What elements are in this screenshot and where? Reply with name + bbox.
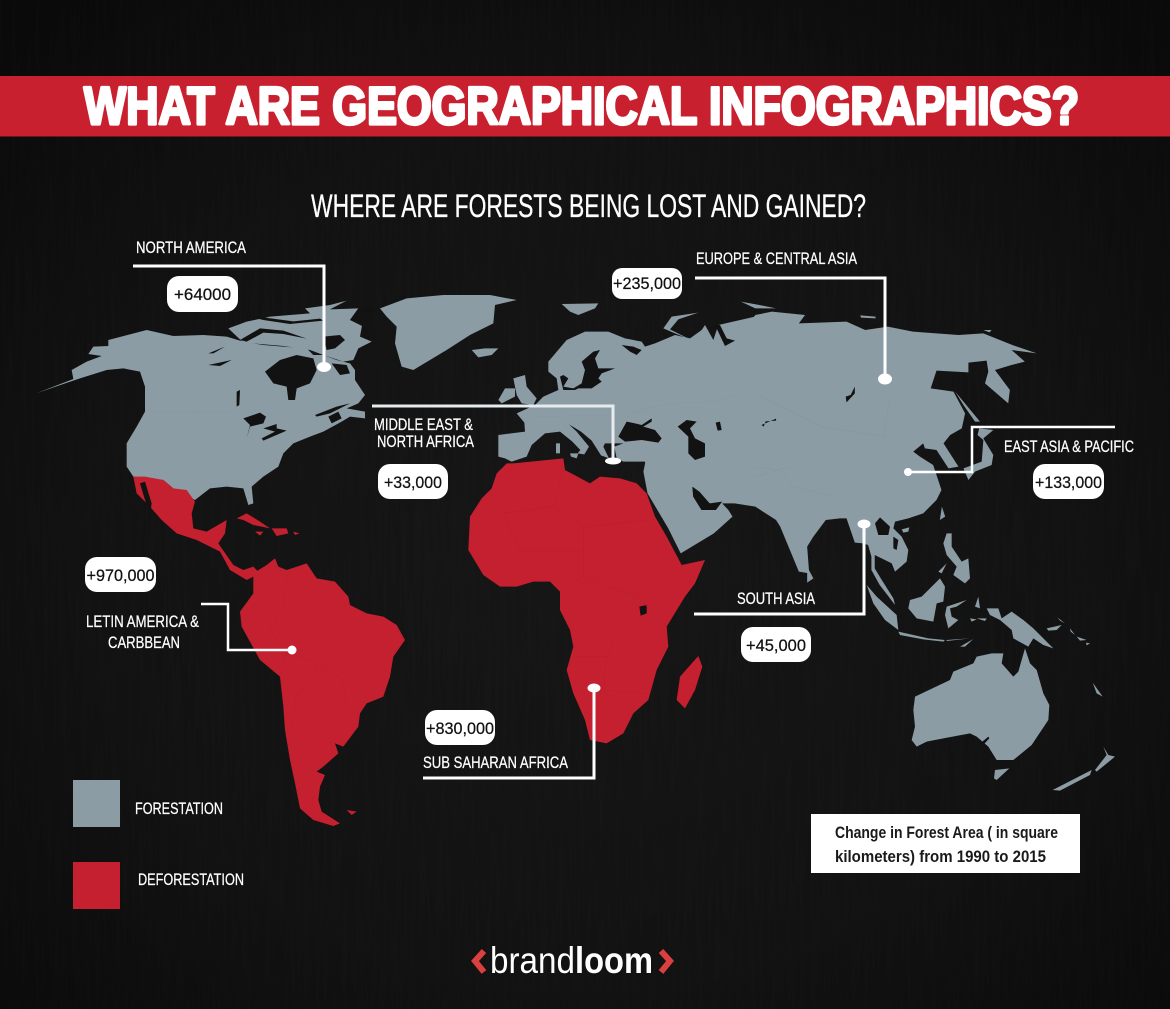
callout: Middle East and North Africa: NORTH AFRICA	[377, 432, 474, 451]
legend swatch: forestation	[73, 780, 120, 827]
value pill: +45,000	[746, 636, 806, 655]
map: Asia forested	[643, 302, 1037, 605]
callout: South Asia: SOUTH ASIA	[737, 589, 816, 608]
logo: brandloom: loom	[575, 940, 653, 981]
map: Europe and western Russia forested	[498, 303, 755, 490]
callout: East Asia and Pacific	[904, 427, 1134, 499]
logo: brandloom: brand	[490, 940, 575, 981]
world map	[36, 295, 1115, 826]
legend	[73, 780, 244, 909]
callout: Latin America and Caribbean	[85, 557, 296, 654]
callout: Latin America and Caribbean: CARBBEAN	[108, 633, 180, 652]
note box: kilometers) from 1990 to 2015	[835, 847, 1046, 866]
value pill: +235,000	[613, 274, 681, 293]
value pill: +64000	[174, 285, 231, 304]
map: North America forested	[36, 295, 517, 505]
callout: South Asia	[694, 520, 870, 662]
value pill	[167, 276, 238, 312]
value pill	[612, 268, 682, 299]
value pill	[1033, 464, 1104, 499]
legend: DEFORESTATION	[138, 870, 244, 889]
value pill: +830,000	[426, 719, 494, 738]
callout: Sub Saharan Africa	[423, 684, 600, 778]
value pill	[85, 557, 156, 592]
value pill	[378, 464, 448, 499]
map: South America deforested	[240, 558, 405, 826]
callout: Europe and Central Asia: EUROPE & CENTRAL ASIA	[696, 249, 857, 268]
callout: Sub Saharan Africa: SUB SAHARAN AFRICA	[423, 753, 569, 772]
subtitle: WHERE ARE FORESTS BEING LOST AND GAINED?	[311, 188, 866, 224]
legend swatch: deforestation	[73, 862, 120, 909]
callout: North America	[133, 238, 331, 372]
value pill: +33,000	[384, 473, 442, 492]
value pill	[425, 710, 495, 745]
logo: brandloom	[475, 940, 670, 981]
map: Indonesia and Oceania forested	[867, 563, 1115, 791]
map: Mexico and Central America deforested	[133, 477, 299, 580]
callout: Middle East and North Africa: MIDDLE EAST &	[374, 415, 473, 434]
value pill: +133,000	[1035, 473, 1102, 492]
map: Southeast Asia details	[875, 517, 970, 583]
callout: Latin America and Caribbean: LETIN AMERICA &	[86, 612, 200, 631]
map: Africa deforested	[468, 458, 705, 743]
legend: FORESTATION	[135, 799, 223, 818]
note box	[811, 814, 1080, 873]
callout: Europe and Central Asia	[612, 249, 892, 384]
note box: Change in Forest Area ( in square	[835, 823, 1058, 842]
callout: North America: NORTH AMERICA	[136, 238, 247, 257]
value pill: +970,000	[86, 566, 154, 585]
title band	[0, 76, 1170, 136]
value pill	[741, 627, 811, 662]
callout: Middle East and North Africa	[372, 406, 621, 499]
